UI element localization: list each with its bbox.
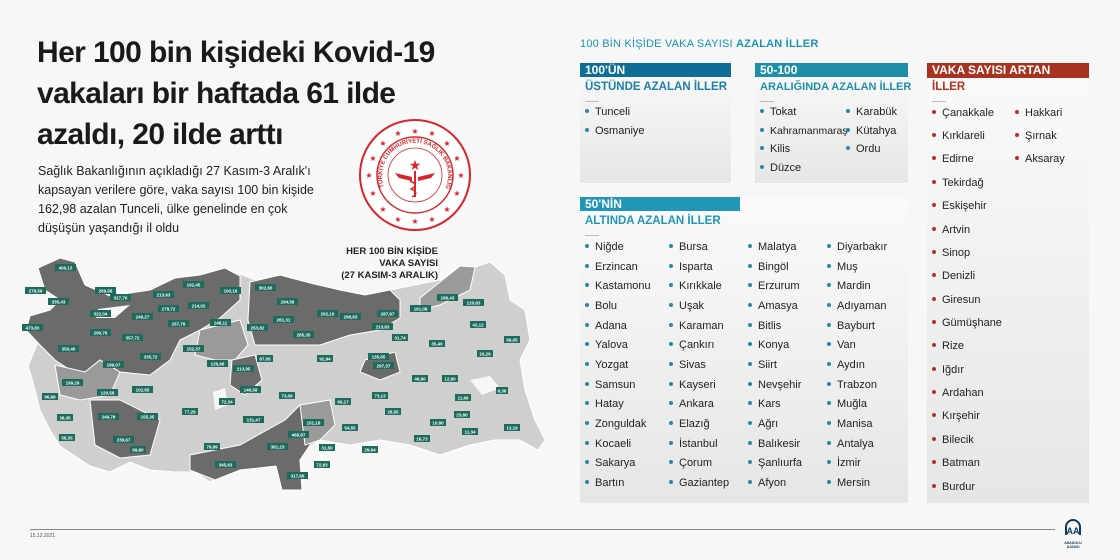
panel: below 50: Bolu [595,300,617,312]
date: 15.12.2021 [30,533,55,539]
panel: increasing: Rize [942,340,964,352]
panel: below 50: Çorum [679,457,712,469]
panel: below 50: Muş [837,261,858,273]
header bar: 100'ÜN [585,63,625,77]
intro text: kapsayan verilere göre, vaka sayısı 100 bin kişide [38,183,314,197]
panel: below 50: İstanbul [679,438,718,450]
map: Turkey provinces: 12,60 [444,376,456,382]
icon: ministry logo: ★ [453,154,461,163]
map: Turkey provinces: 131,47 [247,418,261,422]
panel: below 50: Zonguldak [595,418,646,430]
panel: 50-100: Karabük [856,106,897,118]
panel: below 50: Bingöl [758,261,789,273]
icon: ministry logo: ★ [457,171,465,180]
panel: below 50: Ağrı [758,418,778,430]
panel: below 50: Aydın [837,359,865,371]
map: Turkey provinces: 279,72 [162,306,176,312]
icon: AA logo: ANADOLU AJANSI [1064,541,1082,549]
map: Turkey provinces: 42,12 [472,322,484,328]
map: Turkey provinces: 58,35 [61,436,73,440]
map: Turkey provinces: 298,63 [344,314,358,320]
map: Turkey provinces: 214,02 [192,304,206,308]
panel: increasing: Şırnak [1025,130,1057,142]
map: Turkey provinces: 238,67 [117,438,131,442]
title [37,36,435,151]
map legend title [341,246,438,281]
map: Turkey provinces: 249,78 [102,414,116,420]
panel: below 50: Konya [758,339,789,351]
intro text: Sağlık Bakanlığının açıkladığı 27 Kasım-3 Aralık'ı [38,164,311,178]
panel: below 50: Kocaeli [595,438,631,450]
intro text: 162,98 azalan Tunceli, ülke genelinde en çok [38,202,288,216]
map: Turkey provinces: 335,43 [52,300,66,304]
map: Turkey provinces: 285,35 [297,332,311,338]
section heading: 100 BİN KİŞİDE VAKA SAYISI AZALAN İLLER [580,38,818,50]
map: Turkey provinces: 152,37 [187,346,201,352]
panel: increasing: Denizli [942,270,975,282]
map: Turkey provinces: 199,07 [107,362,121,368]
map: Turkey provinces: 468,87 [292,432,306,438]
header bar [927,63,1089,78]
map: Turkey provinces: 11,66 [457,396,469,400]
panel: increasing: Aksaray [1025,153,1065,165]
map: Turkey provinces: 126,66 [211,362,225,366]
header bar [580,197,740,211]
icon: ministry logo: ★ [411,217,419,226]
panel: below 50: Malatya [758,241,797,253]
map: Turkey provinces: 6,36 [498,388,507,394]
panel: increasing: Bilecik [942,434,974,446]
map: Turkey provinces: 278,59 [29,288,43,294]
map: Turkey provinces: 26,55 [387,410,399,414]
panel: below 50: Trabzon [837,379,877,391]
panel: below 50: Adıyaman [837,300,887,312]
map: Turkey provinces: 345,63 [219,462,233,468]
panel: below 50: Mardin [837,280,871,292]
map: Turkey provinces: 72,83 [316,462,328,468]
panel: increasing: Burdur [942,481,975,493]
panel: below 50: Şanlıurfa [758,457,802,469]
panel: below 50: Kayseri [679,379,716,391]
map: Turkey provinces: 287,97 [381,312,395,316]
panel: below 50: İzmir [837,457,861,469]
map: Turkey provinces: 249,27 [136,314,150,320]
panel: below 50: Mersin [837,477,870,489]
panel: 50-100: Kütahya [856,125,896,137]
icon: ministry logo: ★ [394,215,402,224]
panel: increasing: İLLER [932,81,965,93]
panel: below 50: Kırıkkale [679,280,722,292]
map: Turkey provinces: 213,95 [237,366,251,372]
map: Turkey provinces: 335,72 [144,354,158,360]
map: Turkey provinces: 199,29 [66,380,80,386]
map: Turkey provinces: 135,65 [372,354,386,360]
panel: below 50: Van [837,339,856,351]
panel: below 50: Ankara [679,398,714,410]
panel: below 50: Erzurum [758,280,800,292]
panel: below 50: Çankırı [679,339,714,351]
panel: 50-100: Ordu [856,143,880,155]
panel: below 50: Kastamonu [595,280,651,292]
map: Turkey provinces: 192,45 [187,282,201,288]
map: Turkey provinces: 29,64 [364,448,376,452]
icon: ministry logo: ★ [411,127,419,136]
map: Turkey provinces: 60,17 [337,400,349,404]
panel: 50-100: Kahramanmaraş [770,125,848,137]
panel: increasing: Artvin [942,224,970,236]
icon: ministry logo: ★ [379,139,387,148]
icon: ministry logo: TÜRKİYE CUMHURİYETİ SAĞLIK BAKANLIĞI [378,138,452,189]
panel: increasing: Hakkari [1025,107,1062,119]
panel: increasing: Çanakkale [942,107,994,119]
panel: increasing: Tekirdağ [942,177,984,189]
map: Turkey provinces: 317,66 [291,474,305,478]
map: Turkey provinces: 155,35 [141,414,155,420]
panel: below 50: Bayburt [837,320,875,332]
icon: ministry logo: ★ [379,205,387,214]
panel: above 100: Tunceli [595,106,630,118]
map: Turkey provinces: 31,74 [394,336,406,340]
panel: below 50: Balıkesir [758,438,800,450]
title: Her 100 bin kişideki Kovid-19 [37,36,435,69]
title: vakaları bir haftada 61 ilde [37,77,395,110]
panel: below 50: Diyarbakır [837,241,887,253]
icon: ministry logo: ★ [394,129,402,138]
footer line [30,529,1055,530]
map: Turkey provinces: 38,35 [59,416,71,420]
map: Turkey provinces: 322,04 [94,312,108,316]
icon: ministry logo: ★ [369,154,377,163]
map: Turkey provinces: 10,80 [432,420,444,426]
header bar: 50-100 [760,63,797,77]
icon: ministry logo: ★ [365,171,373,180]
map: Turkey provinces: 151,18 [307,420,321,426]
panel: increasing: Edirne [942,153,974,165]
panel: below 50: Sivas [679,359,706,371]
title: azaldı, 20 ilde arttı [37,118,283,151]
panel: increasing: Batman [942,457,980,469]
icon: AA logo: AA [1066,526,1080,536]
panel: 50-100 [755,63,908,183]
panel: above 100 [580,63,731,183]
panel: below 50 [580,197,908,503]
map: Turkey provinces: 269,58 [99,288,113,294]
panel: above 100: ÜSTÜNDE AZALAN İLLER [585,81,727,93]
map: Turkey provinces: 327,70 [114,296,128,300]
map: Turkey provinces: 76,89 [206,444,218,450]
header bar [580,63,731,77]
panel: below 50: Sakarya [595,457,635,469]
map: Turkey provinces: 302,60 [259,286,273,290]
icon: ministry logo: ★ [443,205,451,214]
map: Turkey provinces: 35,40 [431,342,443,346]
map: Turkey provinces: 92,94 [319,356,331,362]
map: Turkey provinces: 148,11 [214,320,228,326]
panel: 50-100: ARALIĞINDA AZALAN İLLER [760,81,911,93]
panel: below 50: Uşak [679,300,704,312]
header bar: VAKA SAYISI ARTAN [932,63,1050,77]
map: Turkey provinces: 16,29 [479,352,491,356]
map: Turkey provinces: 253,82 [251,326,265,330]
map: Turkey provinces: 73,09 [281,394,293,398]
map: Turkey provinces: 69,60 [132,448,144,452]
map: Turkey provinces: 213,83 [376,324,390,330]
map: Turkey provinces: 96,98 [44,394,56,400]
panel: below 50: ALTINDA AZALAN İLLER [585,215,721,227]
map: Turkey provinces: 13,19 [506,426,518,430]
panel: below 50: Yozgat [595,359,628,371]
panel: below 50: Adana [595,320,627,332]
icon: ministry logo: ★ [453,189,461,198]
panel: below 50: Niğde [595,241,624,253]
panel: below 50: Kars [758,398,781,410]
map: Turkey provinces: 406,13 [59,266,73,270]
icon: ministry logo [359,119,471,231]
map: Turkey provinces: 473,83 [26,326,40,330]
panel: below 50: Isparta [679,261,713,273]
panel: 50-100: Kilis [770,143,790,155]
intro text: düşüşün yaşandığı il oldu [38,221,179,235]
panel: below 50: Samsun [595,379,635,391]
panel: increasing: Kırşehir [942,410,980,422]
header bar [755,63,908,77]
panel: below 50: Muğla [837,398,867,410]
map: Turkey provinces: 267,79 [172,322,186,326]
map: Turkey provinces: 102,65 [136,388,150,392]
panel: below 50: Gaziantep [679,477,729,489]
panel: below 50: Afyon [758,477,786,489]
panel: below 50: Erzincan [595,261,638,273]
panel: increasing: Sinop [942,247,970,259]
map legend title: VAKA SAYISI [379,258,438,269]
map: Turkey provinces: 350,40 [62,346,76,352]
map: Turkey provinces: 31,50 [321,446,333,450]
panel: increasing: Gümüşhane [942,317,1002,329]
panel: below 50: Elazığ [679,418,710,430]
panel: below 50: Siirt [758,359,777,371]
panel: below 50: Amasya [758,300,798,312]
map: Turkey provinces: 297,37 [377,364,391,368]
panel: below 50: Manisa [837,418,872,430]
icon: ministry logo: ★ [443,139,451,148]
map: Turkey provinces: 77,29 [184,410,196,414]
map: Turkey provinces: 262,10 [321,312,335,316]
icon: ministry logo: ★ [428,215,436,224]
map: Turkey provinces: 357,72 [126,336,140,340]
map legend title: (27 KASIM-3 ARALIK) [341,270,438,281]
panel: below 50: Bursa [679,241,708,253]
map: Turkey provinces: 16,73 [416,436,428,442]
panel: increasing: Eskişehir [942,200,987,212]
panel: below 50: Nevşehir [758,379,801,391]
icon: ministry logo: ★ [409,157,421,173]
panel: increasing: Iğdır [942,364,964,376]
map: Turkey provinces: 213,63 [157,292,171,298]
map: Turkey provinces: 191,08 [414,306,428,312]
map: Turkey provinces: 186,43 [441,296,455,300]
map: Turkey provinces: 23,80 [456,412,468,418]
panel: below 50: Bitlis [758,320,781,332]
panel: increasing [927,63,1089,503]
map: Turkey provinces: 146,58 [244,388,258,392]
panel: below 50: Antalya [837,438,874,450]
map: Turkey provinces: 54,55 [344,426,356,430]
map: Turkey provinces: 87,05 [259,356,271,362]
map: Turkey provinces: 11,34 [464,430,476,434]
map: Turkey provinces: 193,16 [224,288,238,294]
intro text [38,164,314,235]
map: Turkey provinces: 46,90 [414,376,426,382]
header bar: 50'NİN [585,197,622,211]
map: Turkey provinces: 120,58 [101,390,115,396]
icon: ministry logo: ★ [428,129,436,138]
map: Turkey provinces: 294,56 [281,300,295,304]
panel: above 100: Osmaniye [595,125,645,137]
panel: below 50: Yalova [595,339,628,351]
panel: increasing: Ardahan [942,387,984,399]
panel: below 50: Hatay [595,398,624,410]
panel: increasing: Kırklareli [942,130,985,142]
map: Turkey provinces: 381,23 [271,444,285,450]
panel: 50-100: Tokat [770,106,796,118]
icon: AA logo [1064,519,1082,549]
panel: 50-100: Düzce [770,162,801,174]
map: Turkey provinces: 66,05 [506,338,518,342]
map: Turkey provinces: 73,13 [374,394,386,398]
map: Turkey provinces: 261,31 [277,318,291,322]
map: Turkey provinces: 120,63 [467,300,481,306]
map: Turkey provinces: 290,76 [94,330,108,336]
panel: below 50: Karaman [679,320,724,332]
map: Turkey provinces: 72,34 [221,400,233,404]
panel: increasing: Giresun [942,294,981,306]
panel: below 50: Bartın [595,477,624,489]
map legend title: HER 100 BİN KİŞİDE [346,246,438,257]
icon: ministry logo: ★ [369,189,377,198]
map: Turkey provinces [22,258,544,490]
